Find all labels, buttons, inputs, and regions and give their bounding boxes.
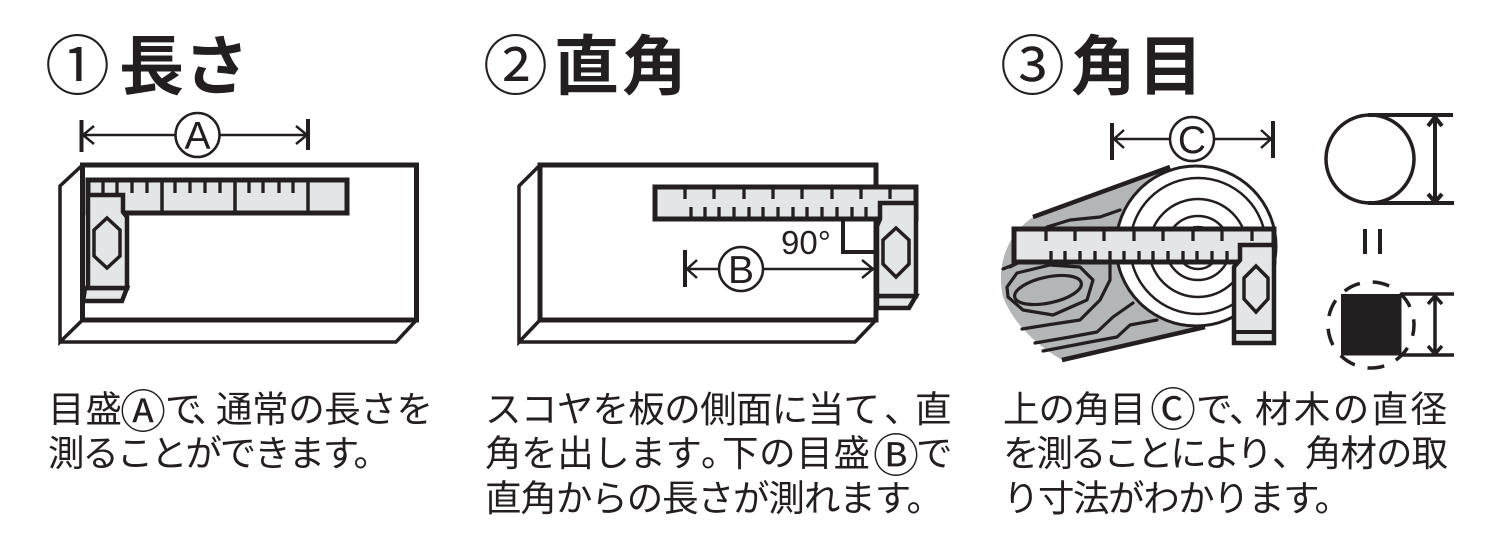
- heading: 1 length: ①: [45, 30, 110, 103]
- text block: angle scale description: 角材の取: [1305, 433, 1448, 474]
- text block: length description: 測ることができます。: [48, 433, 390, 474]
- text block: angle scale description: り寸法がわかります。: [1003, 478, 1351, 519]
- heading: 1 length: [45, 30, 249, 103]
- diagram: round log diameter: [1326, 115, 1454, 203]
- dimension B: [685, 247, 874, 292]
- panel: length: [45, 30, 416, 342]
- dimension C: C: [1178, 119, 1206, 162]
- text block: right angle description: 下の目盛: [722, 433, 870, 474]
- heading: 2 right angle: ②: [483, 30, 548, 103]
- text block: length description: 通常の長さを: [216, 389, 433, 430]
- heading: 3 angle scale: 角目: [1071, 30, 1203, 103]
- text block: right angle description: 、: [884, 389, 920, 430]
- text block: length description: [48, 386, 433, 474]
- equals sign: [1365, 229, 1380, 254]
- heading: 3 angle scale: ③: [1000, 30, 1065, 103]
- dimension C: [1112, 117, 1273, 162]
- square ruler: [83, 180, 347, 301]
- dimension B: B: [728, 249, 754, 292]
- heading: 2 right angle: [483, 30, 687, 103]
- panel: right angle: [483, 30, 916, 342]
- text block: length description: 目盛: [48, 389, 122, 430]
- text block: right angle description: Ⓑ: [873, 430, 919, 482]
- right angle marker: 90°: [781, 224, 831, 261]
- text block: angle scale description: 上の角目: [1003, 389, 1146, 430]
- square ruler: [1014, 229, 1274, 343]
- log: [1001, 166, 1276, 360]
- text block: length description: 、: [192, 389, 228, 430]
- right angle marker: [781, 219, 876, 261]
- text block: length description: Ⓐ: [120, 386, 166, 438]
- heading: 1 length: 長さ: [119, 30, 249, 103]
- text block: right angle description: で: [916, 433, 952, 474]
- panel: angle scale: [1000, 30, 1454, 368]
- heading: 3 angle scale: [1000, 30, 1203, 103]
- square ruler: [655, 187, 916, 308]
- dimension A: A: [184, 115, 211, 158]
- text block: right angle description: 直: [915, 389, 952, 430]
- text block: angle scale description: 、: [1272, 433, 1308, 474]
- text block: length description: で: [165, 389, 202, 430]
- text block: right angle description: 。: [701, 433, 738, 474]
- diagram: square timber size: [1328, 282, 1454, 368]
- text block: angle scale description: で: [1196, 389, 1232, 430]
- board: [60, 165, 416, 342]
- text block: angle scale description: Ⓒ: [1150, 384, 1196, 436]
- heading: 2 right angle: 直角: [554, 30, 687, 103]
- board: [519, 165, 876, 342]
- text block: right angle description: [485, 389, 952, 519]
- dimension A: [82, 113, 308, 158]
- text block: right angle description: 角を出します: [485, 433, 702, 474]
- text block: angle scale description: 、: [1229, 389, 1266, 430]
- text block: angle scale description: 材木の直径: [1255, 389, 1447, 430]
- text block: angle scale description: を測ることにより: [1003, 433, 1273, 474]
- text block: right angle description: スコヤを板の側面に当て: [485, 389, 880, 430]
- text block: angle scale description: [1003, 384, 1448, 519]
- text block: right angle description: 直角からの長さが測れます。: [485, 478, 943, 519]
